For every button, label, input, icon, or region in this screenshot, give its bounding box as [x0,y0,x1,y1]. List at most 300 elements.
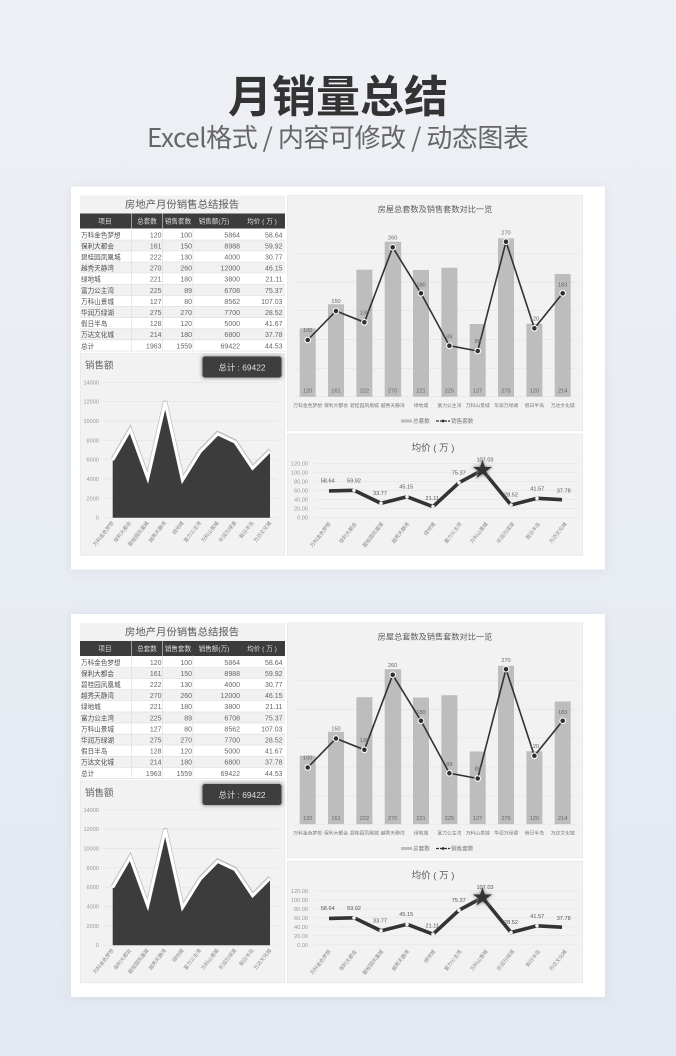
table body: 58.64 [265,232,283,239]
table body: 保利大都会 [81,241,114,250]
subtitle: Excel格式 / 内容可修改 / 动态图表 [147,118,529,155]
area y axis [83,808,99,949]
sales line [305,666,566,781]
price value labels: 28.52 [504,920,518,926]
price value labels: 45.15 [399,485,413,491]
table body: 44.53 [265,343,283,350]
total badge: 总计 : 69422 [218,362,266,372]
price y axis [291,889,308,949]
table body: 161 [150,671,162,678]
area x axis labels: 富力公主湾 [182,947,203,971]
line value labels: 150 [331,299,341,305]
table body: 6800 [224,332,240,339]
bar chart heading: 房屋总套数及销售套数对比一览 [378,204,492,214]
table body: 37.78 [265,332,283,339]
price value labels: 41.57 [530,914,544,920]
area y axis: 14000 [83,380,99,386]
price value labels: 28.52 [504,492,518,498]
bar value labels: 120 [303,389,312,395]
area x axis labels: 绿地城 [171,520,186,536]
table header: 销售套数 [165,644,192,653]
table header: 总套数 [137,216,157,226]
table body: 1559 [176,771,192,778]
table body: 12000 [221,266,240,273]
line value labels: 89 [446,762,453,768]
table body: 107.03 [261,299,283,306]
table body: 69422 [221,771,240,778]
title: 月销量总结 [228,61,448,125]
table body: 21.11 [266,277,283,284]
table body: 107.03 [261,726,283,733]
table body: 270 [180,310,192,317]
price line [329,470,562,509]
line value labels: 260 [388,236,397,242]
bar x axis labels: 富力公主湾 [437,830,462,836]
bar x axis labels [293,830,575,836]
bar x axis labels: 假日半岛 [525,402,544,409]
area y axis: 4000 [87,904,99,910]
price x axis labels: 碧桂园凤凰城 [361,521,385,549]
line value labels: 130 [360,311,369,317]
area x axis labels: 万科山景城 [200,947,221,971]
bar value labels: 221 [416,816,426,822]
area y axis: 2000 [87,924,99,930]
price value labels: 59.92 [347,906,361,912]
table header: 销售额(万) [199,216,229,226]
table body: 225 [150,715,162,722]
area x axis labels: 万科金色梦想 [92,520,116,548]
table body: 59.92 [265,243,283,250]
bar x axis labels: 假日半岛 [525,830,544,836]
bar value labels: 120 [530,816,539,822]
price line [329,898,562,936]
price x axis labels [309,948,569,976]
table body: 41.67 [265,321,283,328]
table body: 富力公主湾 [81,713,114,722]
bar value labels [303,389,567,395]
price x axis labels: 保利大都会 [338,948,359,972]
table body: 221 [150,704,162,711]
price x axis labels: 越秀天静湾 [390,521,411,545]
line value labels: 150 [331,726,341,732]
table body: 80 [184,726,192,733]
price y axis: 40.00 [294,497,308,503]
table body: 275 [150,310,162,317]
table header: 销售额(万) [199,644,229,653]
line value labels: 80 [475,339,481,345]
table body: 假日半岛 [81,319,108,328]
table body: 万达文化城 [81,758,114,767]
bar value labels: 120 [530,389,539,395]
table body: 214 [150,332,162,339]
table body: 46.15 [265,693,283,700]
table body: 260 [180,266,192,273]
table body: 万达文化城 [81,330,114,339]
bar x axis labels: 绿地城 [414,830,428,836]
line value labels: 89 [446,335,453,341]
table body: 221 [150,277,162,284]
price value labels: 41.57 [530,486,544,492]
table body: 碧桂园凤凰城 [81,680,121,689]
table body: 8562 [224,299,240,306]
bar x axis labels: 碧桂园凤凰城 [350,402,379,409]
line value labels: 270 [501,658,511,664]
table body: 59.92 [265,671,283,678]
table body: 富力公主湾 [81,286,114,295]
table body: 69422 [221,343,240,350]
price x axis labels: 万科山景城 [469,948,490,972]
table body: 130 [180,682,192,689]
line value labels [303,230,567,345]
table body: 绿地城 [81,702,101,711]
area y axis [83,380,99,522]
price x axis labels [309,521,569,549]
table body: 260 [180,693,192,700]
panel: dashboard card 1 [71,186,605,570]
area x axis labels: 华润万绿湖 [217,947,238,971]
table body: 127 [150,299,162,306]
area y axis: 12000 [83,827,99,833]
bar value labels: 221 [416,389,426,395]
table body: 28.52 [265,738,283,744]
table body: 75.37 [265,715,283,722]
bar value labels: 161 [331,389,341,395]
area x axis labels: 华润万绿湖 [217,520,238,544]
table body: 8562 [224,726,240,733]
panel: sales area chart [80,781,285,983]
bar x axis labels: 越秀天静湾 [381,402,405,409]
table body: 130 [180,254,192,262]
table body: 180 [180,760,192,767]
price x axis labels: 万达文化城 [548,948,569,972]
table body: 89 [184,288,192,295]
table body: 120 [180,321,192,328]
table body: 270 [150,266,162,273]
line value labels: 180 [416,282,426,288]
price chart heading: 均价 ( 万 ) [412,870,454,882]
total badge: 总计 : 69422 [218,790,266,800]
price value labels: 37.78 [557,489,571,495]
price x axis labels: 华润万绿湖 [495,948,516,972]
panel: average price line chart [287,434,583,555]
table body: 碧桂园凤凰城 [81,252,121,262]
price x axis labels: 万达文化城 [548,521,569,545]
icon: star marker [472,459,493,479]
table body: 4000 [224,254,240,262]
legend [401,844,474,852]
legend: 总套数 [413,844,430,852]
bar value labels: 127 [473,816,482,822]
price value labels: 107.03 [476,457,494,463]
table body: 41.67 [265,749,283,756]
table body: 222 [150,254,162,262]
table body: 180 [180,277,192,284]
table body: 270 [180,738,192,744]
price y axis: 100.00 [291,898,308,904]
table body: 6708 [224,288,240,295]
total badge [202,356,282,378]
table body: 37.78 [265,760,283,767]
price x axis labels: 华润万绿湖 [495,521,516,545]
table body: 6708 [224,715,240,722]
line value labels: 120 [530,744,539,750]
table header [80,214,285,228]
price y axis: 0.00 [297,515,308,521]
table body: 7700 [224,738,240,744]
table body: 46.15 [265,266,283,273]
table body: 44.53 [265,771,283,778]
price x axis labels: 万科山景城 [469,521,490,545]
bar x axis labels: 保利大都会 [324,830,348,836]
line value labels: 260 [388,663,397,669]
table header: 项目 [98,645,112,653]
table body: 华润万绿湖 [81,736,114,744]
total badge [202,783,282,806]
table body: 1559 [176,343,192,350]
price y axis: 120.00 [291,889,308,895]
bar value labels [303,816,567,822]
price value labels: 58.64 [321,479,335,485]
table body: 万科山景城 [81,724,114,733]
line value labels: 180 [416,710,426,716]
table body: 275 [150,738,162,744]
table body: 1963 [146,771,162,778]
bar value labels: 225 [445,389,454,395]
table title: 房地产月份销售总结报告 [125,626,239,638]
bar x axis labels: 绿地城 [414,402,428,409]
bar value labels: 222 [360,389,369,395]
table body: 161 [150,243,162,250]
area y axis: 4000 [87,477,99,483]
bar value labels: 120 [303,816,312,822]
price value labels: 59.92 [347,479,361,485]
bar value labels: 214 [558,816,567,822]
price y axis: 60.00 [294,916,308,922]
table body: 150 [180,671,192,678]
table body: 1963 [146,343,162,350]
bar value labels: 270 [388,389,397,395]
table body: 万科金色梦想 [81,230,121,239]
line value labels: 183 [558,710,567,716]
table header: 均价 ( 万 ) [247,644,277,653]
price x axis labels: 越秀天静湾 [390,948,411,972]
bar x axis labels: 万科金色梦想 [293,402,322,409]
line value labels: 183 [558,282,567,288]
price x axis labels: 绿地城 [422,521,437,537]
bar value labels: 275 [501,816,511,822]
area x axis labels [92,520,273,548]
panel: units bar and line chart [287,195,583,430]
table body: 5000 [224,749,240,756]
price value labels [321,885,571,930]
icon: star marker [472,886,493,906]
bar value labels: 270 [388,816,397,822]
bar x axis labels: 万科金色梦想 [293,830,322,836]
table body: 万科金色梦想 [81,658,121,667]
table body: 80 [184,299,192,306]
price value labels: 21.11 [426,496,439,502]
table body [80,214,285,351]
area x axis labels: 碧桂园凤凰城 [127,947,151,975]
area y axis: 8000 [87,438,99,444]
area y axis: 10000 [83,846,99,852]
area x axis labels: 保利大都会 [112,947,133,971]
price value labels: 75.37 [452,898,466,904]
area x axis labels: 假日半岛 [238,947,256,968]
table body: 28.52 [265,310,283,317]
panel: units bar and line chart [287,623,583,858]
price x axis labels: 假日半岛 [524,948,542,969]
price x axis labels: 绿地城 [422,948,437,965]
bar chart heading: 房屋总套数及销售套数对比一览 [378,632,492,642]
bar x axis labels: 万科山景城 [466,402,490,409]
table body: 128 [150,321,162,328]
legend: 总套数 [413,417,430,425]
price x axis labels: 万科金色梦想 [309,521,333,549]
line value labels: 130 [360,738,369,744]
area x axis labels: 越秀天静湾 [147,947,168,971]
table body: 128 [150,749,162,756]
legend: 销售套数 [451,844,474,852]
area y axis: 12000 [83,400,99,406]
table body: 8988 [224,671,240,678]
price x axis labels: 富力公主湾 [443,948,464,972]
table body: 120 [150,660,162,667]
price value labels [321,457,571,502]
area y axis: 6000 [87,885,99,891]
table body: 华润万绿湖 [81,308,114,317]
price value labels: 33.77 [373,918,387,924]
table body: 100 [180,232,192,239]
price y axis: 40.00 [294,925,308,931]
bar x axis labels: 万达文化城 [551,830,575,836]
table body: 总计 [81,341,95,350]
table body: 假日半岛 [81,747,108,756]
table header [80,641,285,656]
table body [80,641,285,778]
table body: 7700 [224,310,240,317]
table header: 销售套数 [165,216,192,226]
table body: 222 [150,682,162,689]
price value labels: 107.03 [476,885,494,891]
table body: 120 [150,232,162,239]
table body: 5864 [224,232,240,239]
table body: 30.77 [265,254,283,262]
bar value labels: 222 [360,816,369,822]
price x axis labels: 保利大都会 [338,521,359,545]
table body: 120 [180,749,192,756]
table title: 房地产月份销售总结报告 [125,198,239,211]
area x axis labels [92,947,273,975]
table body: 越秀天静湾 [81,691,114,700]
price x axis labels: 富力公主湾 [443,521,464,545]
area x axis labels: 碧桂园凤凰城 [127,520,151,548]
area x axis labels: 万达文化城 [252,520,273,544]
price y axis: 20.00 [294,934,308,940]
area y axis: 8000 [87,866,99,872]
area chart heading: 销售额 [85,360,114,372]
area y axis: 0 [96,943,99,949]
panel: sales table [80,196,285,352]
table body: 270 [150,693,162,700]
bar x axis labels: 华润万绿湖 [494,402,518,409]
area x axis labels: 假日半岛 [238,520,256,540]
table body: 保利大都会 [81,669,114,678]
price x axis labels: 万科金色梦想 [309,948,333,976]
bar value labels: 225 [445,816,454,822]
panel: average price line chart [287,862,583,983]
area x axis labels: 万科金色梦想 [92,947,116,975]
line value labels: 100 [303,328,312,334]
bars [300,238,571,397]
table header: 均价 ( 万 ) [247,216,277,226]
bar x axis labels: 万达文化城 [551,402,575,409]
price value labels: 37.78 [557,916,571,922]
area y axis: 6000 [87,458,99,464]
table body: 5000 [224,321,240,328]
table body: 75.37 [265,288,283,295]
legend: 销售套数 [451,417,474,425]
table body: 100 [180,660,192,667]
price y axis [291,461,308,521]
area x axis labels: 保利大都会 [112,520,133,544]
table body: 3800 [224,277,240,284]
line value labels: 270 [501,230,511,236]
table body: 58.64 [265,660,283,667]
table body: 总计 [81,769,95,778]
price value labels: 33.77 [373,491,387,497]
line value labels [303,658,567,772]
area series [113,828,270,945]
price x axis labels: 碧桂园凤凰城 [361,948,385,976]
panel: sales table [80,623,285,779]
table body: 万科山景城 [81,297,114,306]
area x axis labels: 绿地城 [171,947,186,964]
area y axis: 0 [96,516,99,522]
table body: 127 [150,726,162,733]
area y axis: 10000 [83,419,99,425]
line value labels: 80 [475,766,481,772]
bar x axis labels: 万科山景城 [466,830,490,836]
area x axis labels: 万达文化城 [252,947,273,971]
table body: 8988 [224,243,240,250]
legend [401,417,474,425]
price y axis: 0.00 [297,943,308,949]
panel: sales area chart [80,353,285,555]
bar x axis labels: 碧桂园凤凰城 [350,830,379,836]
table body: 21.11 [266,704,283,711]
table body: 89 [184,715,192,722]
area x axis labels: 越秀天静湾 [147,520,168,544]
panel: dashboard card 2 [71,614,605,998]
table body: 5864 [224,660,240,667]
table body: 150 [180,243,192,250]
price value labels: 75.37 [452,471,466,477]
bars [300,666,571,824]
table body: 3800 [224,704,240,711]
bar x axis labels: 保利大都会 [324,402,348,409]
bar x axis labels: 越秀天静湾 [381,830,405,836]
bar value labels: 127 [473,389,482,395]
table body: 绿地城 [81,275,101,284]
line value labels: 100 [303,756,312,762]
bar x axis labels [293,402,575,409]
area y axis: 14000 [83,808,99,814]
price y axis: 60.00 [294,488,308,494]
price y axis: 120.00 [291,461,308,467]
bar x axis labels: 华润万绿湖 [494,830,518,836]
table body: 214 [150,760,162,767]
